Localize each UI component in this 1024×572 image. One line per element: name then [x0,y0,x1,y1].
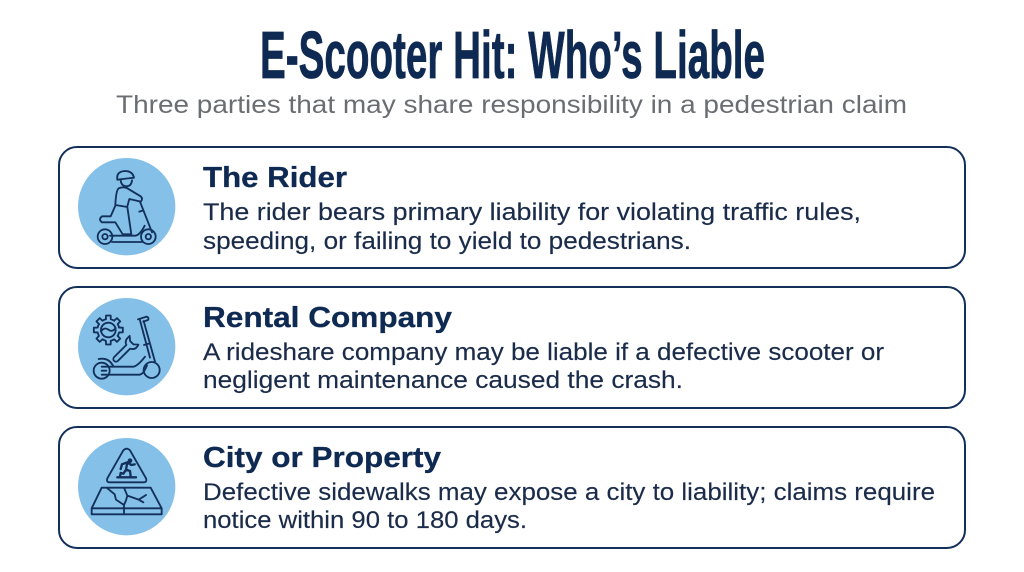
falling person [117,462,136,477]
icon: gear, wrench and scooter [78,298,175,395]
icon: hazard sign and cracked sidewalk [78,438,175,535]
panel: the rider [59,147,965,268]
panel: city or property [59,427,965,548]
rider figure [100,171,142,234]
text: rental company description: negligent maintenance caused the crash. [203,367,683,394]
text: rental company description [203,339,884,394]
scooter [99,317,155,375]
text: rental company description: A rideshare company may be liable if a defective scooter or [203,339,884,366]
panel: rental company [59,287,965,408]
icon: rider on scooter [78,158,175,255]
scooter frame [110,202,152,242]
cracked slab [92,488,162,514]
text: rider description [203,199,861,255]
heading: city or property: City or Property [203,442,441,474]
text: city or property description: notice within 90 to 180 days. [203,507,527,534]
heading: the rider: The Rider [203,162,347,194]
text: rider description: The rider bears primary liability for violating traffic rules, [203,199,861,226]
gear [94,315,123,344]
heading: rental company: Rental Company [203,302,452,334]
text: city or property description: Defective sidewalks may expose a city to liability; claims require [203,479,935,506]
hazard triangle [107,449,146,482]
wrench [109,336,139,365]
text: rider description: speeding, or failing to yield to pedestrians. [203,228,691,255]
subtitle: Three parties that may share responsibility in a pedestrian claim [116,91,907,119]
text: city or property description [203,479,935,534]
